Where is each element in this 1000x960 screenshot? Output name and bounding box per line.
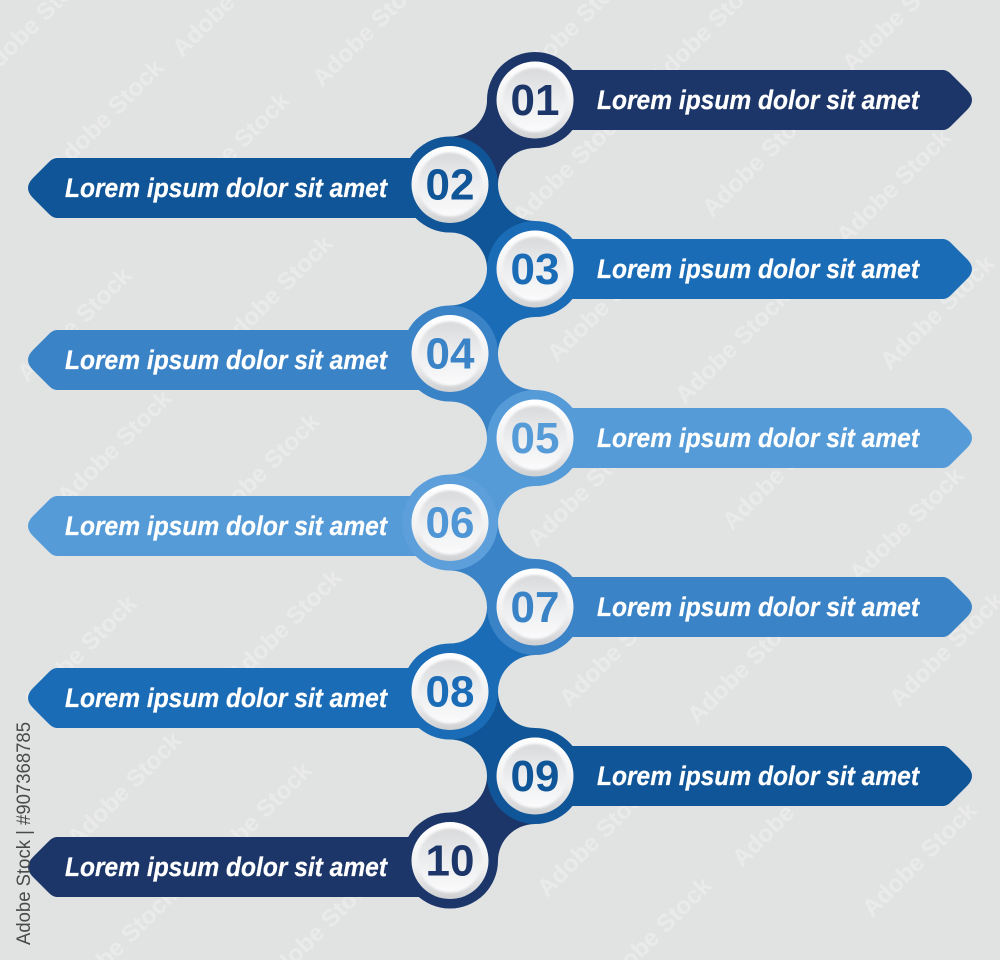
step 02: 02 [426,160,474,210]
step 10 [28,812,498,908]
step 07 [487,559,972,655]
step 06: Lorem ipsum dolor sit amet [65,511,388,541]
step 09: Lorem ipsum dolor sit amet [597,761,920,791]
step 06 [28,474,498,570]
step 10: Lorem ipsum dolor sit amet [65,852,388,882]
watermark pattern: Adobe Stock [697,97,823,222]
watermark pattern: Adobe Stock [554,587,680,712]
step 01 [487,52,972,148]
step 09 [487,728,972,824]
step 07: Lorem ipsum dolor sit amet [597,592,920,622]
watermark pattern: Adobe Stock [844,462,970,587]
watermark pattern: Adobe Stock [670,284,796,409]
step 08: Lorem ipsum dolor sit amet [65,683,388,713]
watermark pattern: Adobe Stock [62,727,188,852]
step 03 [487,221,972,317]
step 08: 08 [426,668,474,716]
step 02 [28,136,498,232]
step 03: Lorem ipsum dolor sit amet [597,254,920,284]
watermark pattern: Adobe Stock [17,590,143,715]
watermark pattern: Adobe Stock [717,410,843,535]
watermark pattern: Adobe Stock [222,564,348,689]
step 08 [28,644,498,740]
watermark pattern: Adobe Stock [831,124,957,249]
step 05 [487,390,972,486]
watermark pattern: Adobe Stock [857,797,983,922]
watermark pattern: Adobe Stock [522,427,648,552]
step 05: Lorem ipsum dolor sit amet [597,423,920,453]
watermark pattern: Adobe Stock [682,604,808,729]
step 04: 04 [426,330,475,378]
watermark pattern: Adobe Stock [192,757,318,882]
connectors between numbered nodes [450,100,535,860]
watermark pattern: Adobe Stock [727,747,853,872]
step 04: Lorem ipsum dolor sit amet [65,345,388,375]
step 06: 06 [426,498,474,548]
step 07: 07 [511,583,559,632]
watermark pattern: Adobe Stock [532,777,658,902]
watermark pattern: Adobe Stock [12,262,138,387]
watermark pattern: Adobe Stock [213,230,339,355]
step 02: Lorem ipsum dolor sit amet [65,173,388,203]
watermark pattern: Adobe Stock [170,87,296,212]
step 03: 03 [511,245,559,294]
step 04 [28,306,498,402]
watermark pattern: Adobe Stock [200,408,326,533]
watermark pattern: Adobe Stock [52,385,178,510]
step 01: Lorem ipsum dolor sit amet [597,85,920,115]
watermark pattern: Adobe Stock [875,250,1000,375]
step 05: 05 [511,414,559,463]
watermark pattern: Adobe Stock [507,104,633,229]
vertical stock id text: Adobe Stock | #907368785 [14,722,35,945]
step 01: 01 [511,76,559,125]
watermark pattern: Adobe Stock [44,54,170,179]
watermark pattern: Adobe Stock [542,242,668,367]
step 09: 09 [511,752,559,801]
step 10: 10 [426,836,474,886]
